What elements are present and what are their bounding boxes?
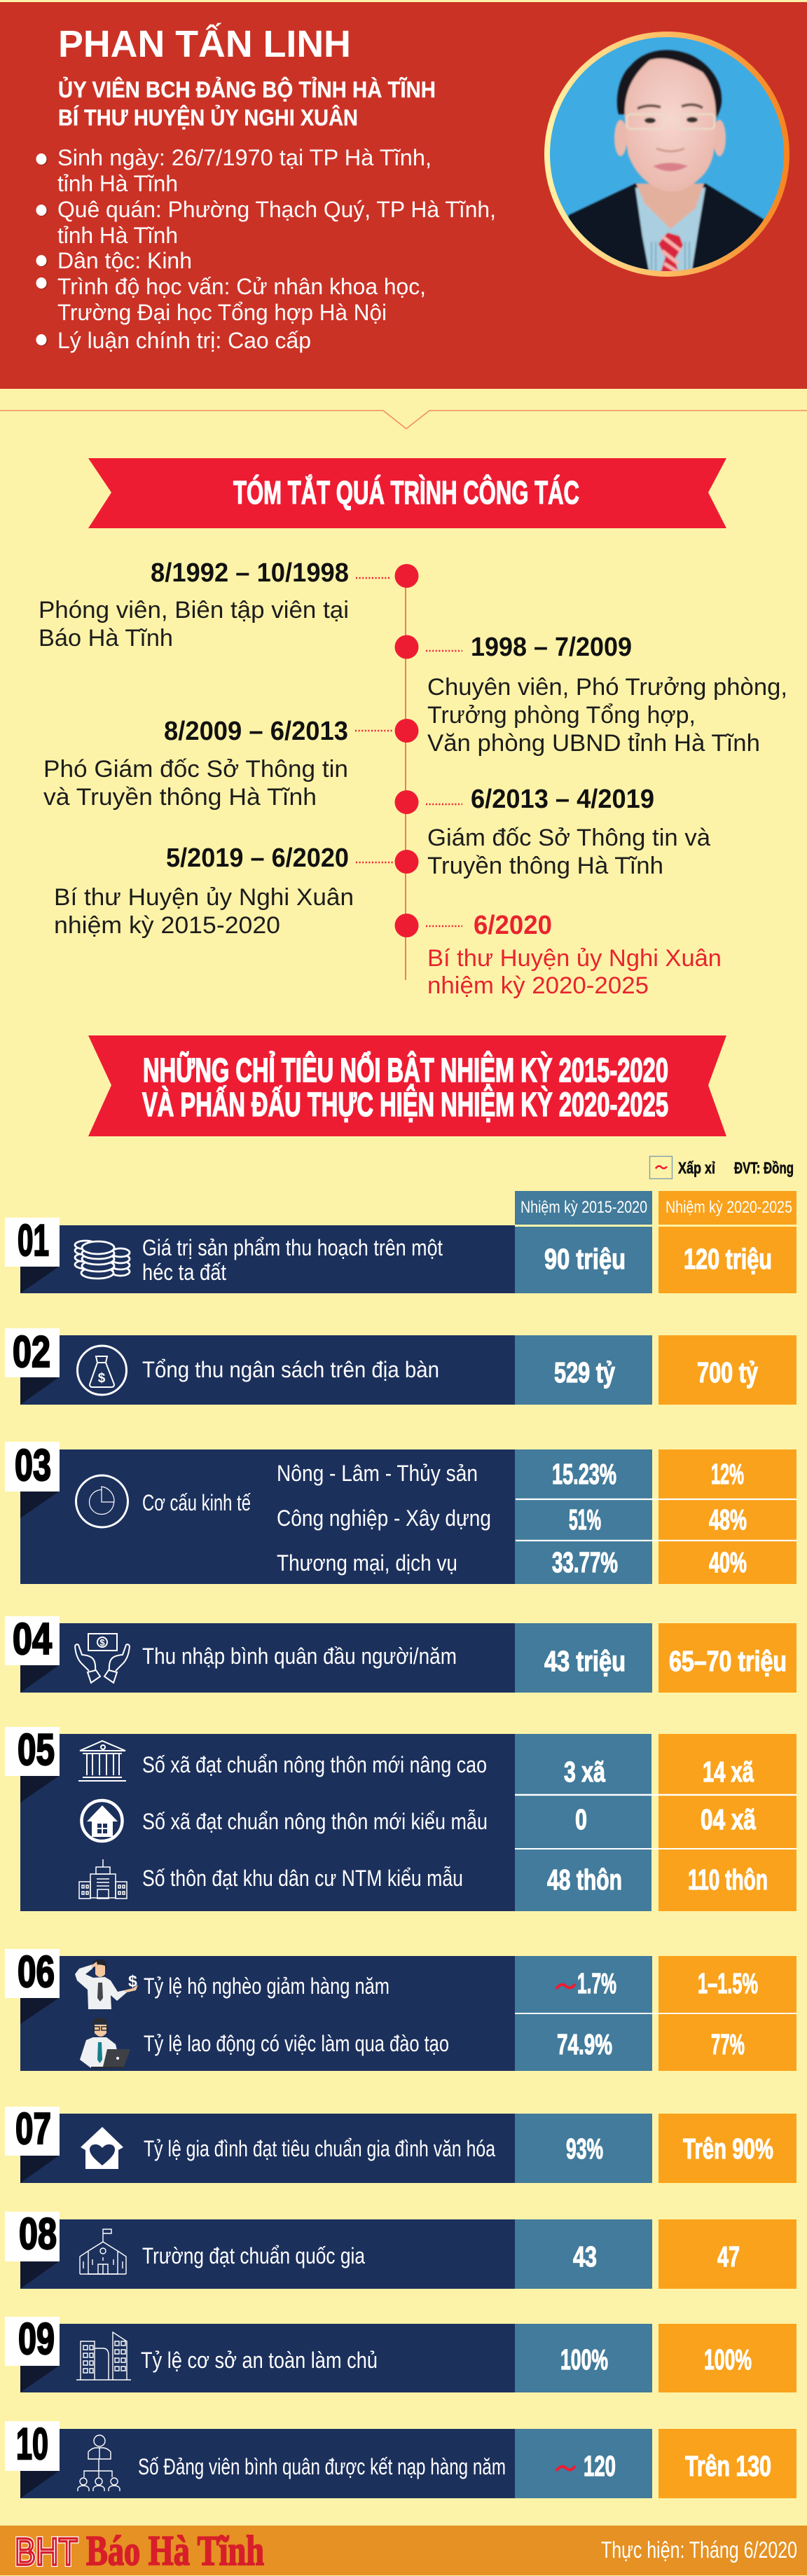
row 02: 700 tỷ [697, 1356, 758, 1389]
row 09: 09 [18, 2315, 55, 2364]
row 07: Tỷ lệ gia đình đạt tiêu chuẩn gia đình văn hóa [144, 2136, 495, 2161]
row 05: 110 thôn [688, 1864, 768, 1896]
subtitle: positions: ỦY VIÊN BCH ĐẢNG BỘ TỈNH HÀ TĨNH [58, 77, 436, 102]
banner: targets heading [88, 1035, 726, 1136]
row 05: 3 xã [564, 1756, 605, 1788]
timeline entry 4: Giám đốc Sở Thông tin và [427, 825, 710, 851]
row 03: Nông - Lâm - Thủy sản [277, 1461, 478, 1486]
row 07: 07 [15, 2105, 51, 2154]
icon: hands holding money: $ [99, 1637, 105, 1648]
icon: organisation chart [78, 2435, 120, 2491]
logo: BHT: BHT [15, 2530, 78, 2573]
row 07: 93% [566, 2133, 603, 2165]
row 10: 10 [16, 2420, 48, 2469]
row 09: Tỷ lệ cơ sở an toàn làm chủ [141, 2348, 378, 2373]
row 05 [5, 1726, 796, 1911]
bullet list: biography: tỉnh Hà Tĩnh [57, 171, 178, 196]
row 01: 120 triệu [684, 1243, 772, 1275]
row 08: 43 [573, 2240, 597, 2273]
timeline entry 2: Văn phòng UBND tỉnh Hà Tĩnh [427, 730, 760, 757]
row 02: 529 tỷ [554, 1356, 615, 1389]
icon: thinking man: $ [128, 1972, 137, 1990]
subtitle: positions: BÍ THƯ HUYỆN ỦY NGHI XUÂN [58, 105, 358, 130]
row 05: 14 xã [703, 1756, 754, 1788]
row 05: 48 thôn [547, 1864, 622, 1896]
row 06: Tỷ lệ lao động có việc làm qua đào tạo [144, 2031, 449, 2056]
row 06: 1.7% [577, 1967, 616, 1999]
bullet list: biography: Sinh ngày: 26/7/1970 tại TP Hà Tĩnh, [57, 145, 432, 170]
timeline entry 3: 8/2009 – 6/2013 [164, 717, 348, 746]
legend: Xấp xỉ [678, 1159, 715, 1177]
row 03: 03 [15, 1441, 51, 1490]
row 04: Thu nhập bình quân đầu người/năm [142, 1644, 457, 1669]
row 05: 0 [575, 1803, 587, 1835]
icon: hands holding money [75, 1634, 130, 1683]
row 03: 51% [569, 1503, 601, 1536]
timeline entry 5 [54, 843, 354, 939]
timeline [39, 558, 787, 999]
row 05: Số xã đạt chuẩn nông thôn mới nâng cao [142, 1752, 487, 1777]
bullet list: biography: Quê quán: Phường Thạch Quý, TP Hà Tĩnh, [57, 197, 496, 222]
legend [650, 1156, 794, 1178]
row 01: 01 [18, 1216, 49, 1265]
row 10 [5, 2420, 796, 2498]
icon: pie chart [76, 1475, 127, 1527]
row 03: 48% [709, 1503, 747, 1536]
row 02 [5, 1328, 796, 1405]
panel: profile header [0, 2, 807, 389]
row 03: 33.77% [552, 1546, 618, 1578]
timeline entry 2 [427, 633, 787, 757]
row 05: 04 xã [701, 1803, 756, 1835]
icon: approximate sign [556, 1984, 575, 1989]
title: name: PHAN TẤN LINH [58, 23, 351, 65]
row 03: Thương mại, dịch vụ [277, 1550, 457, 1576]
column headers [515, 1191, 796, 1225]
banner: work history heading [88, 458, 726, 528]
bullet list: biography: tỉnh Hà Tĩnh [57, 223, 178, 248]
row 10: Trên 130 [685, 2450, 771, 2482]
icon: tall building [79, 1859, 127, 1899]
row 05: 05 [18, 1726, 55, 1775]
row 01: Giá trị sản phẩm thu hoạch trên một [142, 1235, 443, 1260]
timeline entry 6: nhiệm kỳ 2020-2025 [427, 972, 649, 999]
row 04: 04 [13, 1615, 52, 1664]
timeline entry 4: Truyền thông Hà Tĩnh [427, 853, 663, 879]
timeline entry 2: Chuyên viên, Phó Trưởng phòng, [427, 674, 787, 701]
icon: school [80, 2229, 126, 2274]
bullet list: biography: Trường Đại học Tổng hợp Hà Nội [57, 300, 387, 325]
timeline entry 6: 6/2020 [474, 911, 552, 940]
portrait photo [544, 32, 789, 280]
icon: government building [78, 1741, 126, 1781]
row 02: 02 [13, 1328, 50, 1377]
row 03: 12% [711, 1458, 744, 1490]
icon: house in circle [81, 1800, 122, 1841]
banner: work history heading: TÓM TẮT QUÁ TRÌNH CÔNG TÁC [233, 474, 579, 511]
row 06: 1–1.5% [698, 1967, 758, 1999]
row 03 [5, 1441, 796, 1584]
row 10: Số Đảng viên bình quân được kết nạp hàng năm [138, 2454, 506, 2479]
row 10: 120 [584, 2450, 616, 2482]
row 09 [5, 2315, 796, 2392]
row 09: 100% [704, 2343, 752, 2376]
timeline entry 3: Phó Giám đốc Sở Thông tin [43, 756, 348, 783]
logo: BHT: BHT [15, 2530, 78, 2573]
timeline entry 3 [43, 717, 348, 811]
row 09: 100% [560, 2343, 608, 2376]
timeline entry 6: Bí thư Huyện ủy Nghi Xuân [427, 945, 722, 972]
divider with notch [0, 411, 807, 429]
timeline entry 5: 5/2019 – 6/2020 [166, 843, 349, 873]
row 07 [5, 2105, 796, 2183]
bullet list: biography: Trình độ học vấn: Cử nhân khoa học, [57, 274, 426, 299]
row 06 [5, 1948, 796, 2071]
icon: money bag [77, 1346, 126, 1395]
timeline entry 4 [427, 785, 710, 879]
row 03: Công nghiệp - Xây dựng [277, 1506, 491, 1531]
timeline entry 6 [427, 911, 722, 999]
row 06: Tỷ lệ hộ nghèo giảm hàng năm [144, 1974, 389, 1999]
icon: money bag: $ [98, 1371, 106, 1386]
row 03: 40% [709, 1546, 747, 1578]
brand name: Báo Hà Tĩnh [86, 2528, 264, 2574]
row 06: 06 [18, 1948, 55, 1997]
row 06: 77% [711, 2028, 745, 2060]
row 08: 47 [717, 2240, 740, 2273]
subtitle: positions [58, 77, 436, 130]
icon: approximate sign [556, 2466, 575, 2471]
bullet list: biography: Lý luận chính trị: Cao cấp [57, 328, 311, 353]
row 05: Số thôn đạt khu dân cư NTM kiểu mẫu [142, 1866, 463, 1891]
row 05: Số xã đạt chuẩn nông thôn mới kiểu mẫu [142, 1809, 488, 1834]
timeline entry 5: nhiệm kỳ 2015-2020 [54, 912, 280, 939]
row 08: 08 [19, 2210, 57, 2259]
icon: buildings [76, 2332, 131, 2380]
row 08: Trường đạt chuẩn quốc gia [142, 2243, 365, 2268]
icon: house with heart [81, 2127, 123, 2169]
timeline entry 1: Phóng viên, Biên tập viên tại [39, 597, 349, 624]
timeline entry 1 [39, 558, 349, 652]
timeline entry 1: 8/1992 – 10/1998 [151, 558, 349, 588]
icon: coins [75, 1241, 130, 1279]
column headers: Nhiệm kỳ 2015-2020 [520, 1198, 647, 1217]
row 08 [5, 2210, 796, 2289]
row 03: Cơ cấu kinh tế [142, 1490, 251, 1515]
bullet list: biography [36, 145, 496, 353]
footer [0, 2526, 807, 2575]
timeline entry 2: 1998 – 7/2009 [471, 633, 632, 662]
icon: man with laptop [80, 2018, 130, 2068]
icon: thinking man [75, 1959, 138, 2009]
row 01: héc ta đất [142, 1260, 226, 1285]
timeline entry 5: Bí thư Huyện ủy Nghi Xuân [54, 884, 354, 911]
timeline entry 4: 6/2013 – 4/2019 [471, 785, 654, 814]
timeline entry 3: và Truyền thông Hà Tĩnh [43, 784, 317, 811]
row 01: 90 triệu [544, 1243, 626, 1275]
row 02: Tổng thu ngân sách trên địa bàn [142, 1357, 439, 1382]
row 06: 74.9% [557, 2028, 612, 2060]
timeline entry 2: Trưởng phòng Tổng hợp, [427, 702, 696, 729]
row 01 [5, 1216, 796, 1293]
bullet list: biography: Dân tộc: Kinh [57, 248, 192, 273]
row 03: 15.23% [552, 1458, 616, 1490]
row 04 [5, 1615, 796, 1693]
timeline entry 1: Báo Hà Tĩnh [39, 625, 173, 652]
row 07: Trên 90% [683, 2133, 773, 2165]
row 04: 43 triệu [544, 1645, 626, 1677]
